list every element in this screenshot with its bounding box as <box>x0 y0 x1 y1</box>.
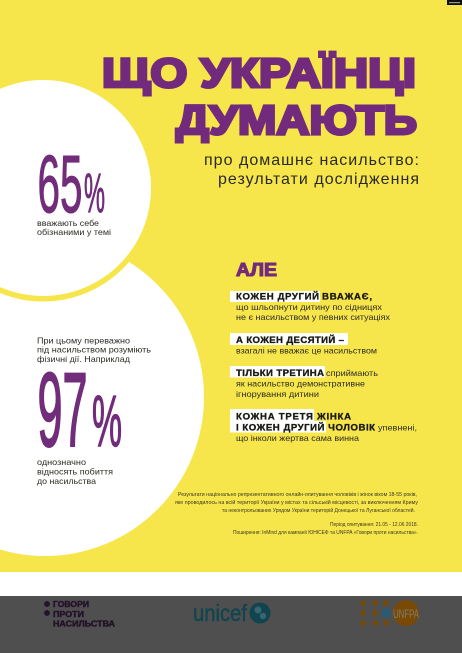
logo: unicef: unicef <box>193 600 248 626</box>
statistic: 65%: % <box>84 161 105 224</box>
text: % <box>92 382 122 462</box>
statistic: 97%: 97 <box>38 352 88 469</box>
intro text: physical violence <box>37 336 151 364</box>
finding 4: КОЖНА ТРЕТЯ ЖІНКА <box>236 412 351 422</box>
intro text: physical violence: При цьому переважно <box>37 336 130 346</box>
statistic: 97%: однозначно <box>37 458 86 467</box>
subtitle <box>204 152 419 188</box>
logo: говори проти насильства: ПРОТИ <box>53 610 84 619</box>
circle: yellow ring around upper <box>0 74 156 302</box>
footer band <box>0 596 462 653</box>
finding 3 <box>230 366 378 399</box>
intro text: physical violence: фізичні дії. Наприклад <box>37 355 130 364</box>
methodology note: Період опитування: 21.05 - 12.06 2018. <box>330 522 418 528</box>
logo: unfpa: UNFPA <box>393 607 419 621</box>
logo: говори проти насильства <box>44 600 115 628</box>
methodology note: Результати національно репрезентативного онлайн-опитування чоловіків і жінок віком 18-55 років, <box>178 491 417 498</box>
statistic: 65%: обізнаними у темі <box>37 228 111 237</box>
circle: upper white <box>0 80 151 296</box>
title: ДУМАЮТЬ <box>176 97 417 143</box>
corner badge <box>447 0 462 5</box>
finding 1 <box>230 290 390 322</box>
finding 1: КОЖЕН ДРУГИЙ <box>236 290 319 302</box>
methodology note: та неконтрольованих Урядом України територій Донецької та Луганської областей. <box>222 507 415 514</box>
circle: lower white <box>0 238 204 556</box>
finding 1: не є насильством у певних ситуаціях <box>236 313 390 322</box>
finding 1: ВВАЖАЄ, <box>322 292 372 302</box>
statistic: 65%: 65 <box>38 139 82 230</box>
subtitle: результати дослідження <box>218 171 419 188</box>
finding 4: упевнені, <box>378 424 417 432</box>
white strip <box>0 572 462 596</box>
finding 3: як насильство демонстративне <box>236 380 365 388</box>
methodology note <box>175 491 419 536</box>
logo: unfpa <box>360 600 419 626</box>
finding 4 <box>230 409 417 443</box>
finding 2 <box>230 333 377 356</box>
finding 3: ігнорування дитини <box>236 390 319 399</box>
logo: говори проти насильства: ГОВОРИ <box>53 600 89 609</box>
statistic: 97%: до насильства <box>37 477 96 486</box>
finding 1: що шльопнути дитину по сідницях <box>236 303 382 312</box>
statistic: 97% <box>37 352 122 486</box>
methodology note: яке проводилось на всій території України у містах та сільській місцевості, за виключенням Криму <box>175 499 419 506</box>
statistic: 65%: вважають себе <box>37 219 99 228</box>
finding 3: ТІЛЬКИ ТРЕТИНА <box>236 368 324 379</box>
finding 4: що інколи жертва сама винна <box>236 434 359 443</box>
methodology note: Поширення: InMind для кампанії ЮНІСЕФ та UNFPA «Говори проти насильства». <box>233 530 418 536</box>
logo: говори проти насильства: НАСИЛЬСТВА <box>53 620 115 628</box>
intro text: physical violence: під насильством розуміють <box>37 346 151 354</box>
subtitle: про домашнє насильство: <box>204 152 419 169</box>
finding 4: І КОЖЕН ДРУГИЙ ЧОЛОВІК <box>236 422 375 434</box>
finding 2: взагалі не вважає це насильством <box>236 346 377 356</box>
finding 3: сприймають <box>326 369 378 378</box>
statistic: 97%: відносять побиття <box>37 468 113 476</box>
finding 2: А КОЖЕН ДЕСЯТИЙ – <box>236 334 345 346</box>
heading: але: АЛЕ <box>236 260 277 280</box>
title <box>102 50 417 143</box>
title: ЩО УКРАЇНЦІ <box>102 50 416 96</box>
